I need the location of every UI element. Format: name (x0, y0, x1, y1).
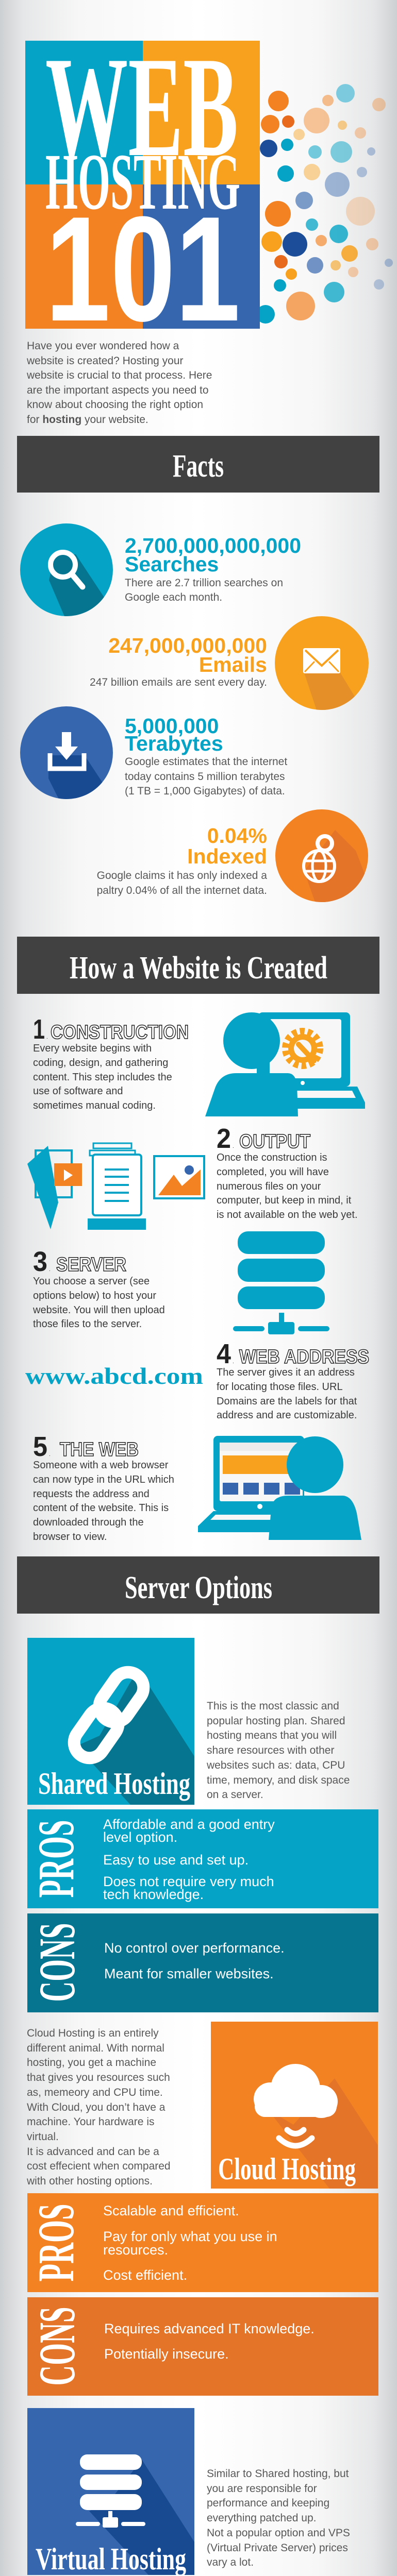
heading bar: Server Options (17, 1556, 379, 1614)
cloud pros: Cost efficient. (103, 2267, 187, 2283)
step heading: . (49, 1452, 51, 1458)
fact numbers (108, 634, 267, 676)
step text: downloaded through the (33, 1517, 144, 1528)
shared cons: Meant for smaller websites. (104, 1966, 274, 1981)
step text: Once the construction is (217, 1152, 327, 1163)
icon: envelope circle (275, 616, 369, 710)
title block: WEB HOSTING 101 (25, 41, 260, 329)
step text: computer, but keep in mind, it (217, 1195, 351, 1206)
step text (33, 1043, 172, 1111)
fact numbers (187, 824, 267, 868)
virtual hosting description: vary a lot. (207, 2556, 254, 2568)
intro text: Have you ever wondered how a (27, 340, 179, 352)
cloud hosting description: With Cloud, you don’t have a (27, 2102, 165, 2113)
icon: output files (27, 1143, 205, 1230)
intro text: are the important aspects you need to (27, 384, 209, 396)
shared hosting description: on a server. (207, 1789, 263, 1801)
virtual hosting description: (Virtual Private Server) prices (207, 2542, 348, 2554)
fact numbers (125, 534, 301, 576)
virtual hosting description: performance and keeping (207, 2497, 329, 2509)
icon: server (76, 2454, 145, 2528)
fact text: today contains 5 million terabytes (125, 771, 285, 782)
icon: globe circle (275, 809, 368, 902)
shared hosting description: hosting means that you will (207, 1730, 337, 1741)
shared pros (27, 1809, 378, 1908)
fact text: There are 2.7 trillion searches on (125, 577, 283, 589)
fact text: Google claims it has only indexed a (97, 870, 267, 882)
icon: chain link (68, 1666, 150, 1764)
intro text: website is crucial to that process. Here (27, 369, 212, 381)
step text: address and are customizable. (217, 1410, 357, 1421)
step heading: . (49, 1267, 51, 1273)
intro text: know about choosing the right option (27, 399, 203, 411)
step text: Every website begins with (33, 1043, 152, 1054)
shared hosting description: websites such as: data, CPU (207, 1759, 345, 1771)
cloud hosting description: Cloud Hosting is an entirely (27, 2027, 159, 2039)
shared hosting description (207, 1700, 350, 1801)
shared cons (27, 1913, 378, 2012)
heading bar: How a Website is Created (17, 937, 379, 994)
shared pros: level option. (103, 1829, 177, 1845)
step heading (33, 1015, 189, 1041)
shared pros: Easy to use and set up. (103, 1852, 249, 1868)
panel: cloud hosting (211, 2022, 378, 2189)
step text: completed, you will have (217, 1166, 329, 1178)
step heading: . (233, 1359, 234, 1365)
step text (33, 1276, 165, 1330)
icon: cloud (254, 2064, 338, 2118)
cloud hosting description: machine. Your hardware is (27, 2116, 154, 2128)
cloud cons (27, 2297, 378, 2396)
cloud hosting description: different animal. With normal (27, 2042, 164, 2054)
step text: browser to view. (33, 1531, 107, 1543)
cloud hosting description: that gives you resources such (27, 2072, 170, 2083)
cloud hosting description: as, memeory and CPU time. (27, 2087, 163, 2098)
fact 2: emails (90, 616, 369, 710)
step text: content of the website. This is (33, 1502, 169, 1514)
intro text: for hosting your website. (27, 414, 148, 426)
cloud pros (27, 2193, 378, 2292)
fact numbers: 2,700,000,000,000 (125, 534, 301, 557)
heading bar: Server Options: Server Options (125, 1570, 272, 1605)
fact numbers: 5,000,000 (125, 714, 219, 738)
shared pros: tech knowledge. (103, 1887, 204, 1902)
cloud cons: Requires advanced IT knowledge. (104, 2321, 315, 2336)
step text: sometimes manual coding. (33, 1100, 156, 1111)
step text: use of software and (33, 1086, 123, 1097)
intro text (27, 340, 212, 426)
step text: You choose a server (see (33, 1276, 150, 1287)
cloud hosting description: It is advanced and can be a (27, 2146, 159, 2158)
step 4: web address (217, 1341, 369, 1421)
step text: The server gives it an address (217, 1367, 355, 1378)
step heading (33, 1247, 127, 1273)
step text: Domains are the labels for that (217, 1396, 357, 1407)
step text: requests the address and (33, 1488, 150, 1500)
shared hosting description: time, memory, and disk space (207, 1774, 350, 1786)
fact text (125, 577, 283, 603)
decorative icon bubbles (260, 84, 393, 324)
fact numbers: Indexed (187, 844, 267, 868)
fact numbers (125, 714, 223, 755)
step heading (217, 1125, 310, 1151)
step heading: . (46, 1035, 48, 1040)
panel: shared hosting (27, 1638, 194, 1805)
virtual hosting description: everything patched up. (207, 2512, 316, 2524)
step text: options below) to host your (33, 1290, 156, 1301)
shared hosting description: share resources with other (207, 1744, 334, 1756)
fact text: 247 billion emails are sent every day. (90, 676, 267, 688)
step heading (217, 1341, 369, 1366)
cloud pros: Scalable and efficient. (103, 2203, 239, 2218)
fact text: paltry 0.04% of all the internet data. (97, 885, 267, 896)
step text: coding, design, and gathering (33, 1057, 168, 1069)
step text: can now type in the URL which (33, 1474, 174, 1485)
fact 4: indexed (97, 809, 368, 902)
step 2: output (217, 1125, 358, 1221)
virtual hosting description: you are responsible for (207, 2483, 317, 2495)
step 3: server (33, 1247, 165, 1330)
heading bar: Facts: Facts (173, 449, 224, 484)
step text: content. This step includes the (33, 1072, 172, 1083)
fact numbers: Terabytes (125, 732, 223, 755)
step text: those files to the server. (33, 1318, 142, 1330)
step text: Someone with a web browser (33, 1460, 168, 1471)
fact numbers: 0.04% (207, 824, 267, 848)
cloud hosting description: hosting, you get a machine (27, 2057, 156, 2069)
fact text (97, 870, 267, 896)
cloud hosting description (27, 2027, 171, 2187)
cloud cons: Potentially insecure. (104, 2346, 229, 2362)
fact text: (1 TB = 1,000 Gigabytes) of data. (125, 785, 285, 797)
icon: magnifier circle (20, 523, 113, 616)
shared pros: Does not require very much (103, 1874, 274, 1889)
shared hosting description: popular hosting plan. Shared (207, 1715, 345, 1727)
heading bar: Facts (17, 436, 379, 493)
fact numbers: Searches (125, 552, 219, 576)
shared pros: Affordable and a good entry (103, 1817, 275, 1832)
step 1: construction (33, 1015, 189, 1111)
icon: download circle (20, 706, 113, 799)
fact text (125, 756, 288, 797)
icon: person browsing (198, 1436, 361, 1540)
shared hosting description: This is the most classic and (207, 1700, 339, 1712)
fact 1: searches (20, 523, 301, 616)
cloud pros: Pay for only what you use in (103, 2229, 277, 2244)
cloud hosting description: cost effecient when compared (27, 2160, 171, 2172)
fact numbers: Emails (199, 653, 267, 676)
fact text: Google each month. (125, 591, 222, 603)
step text: is not available on the web yet. (217, 1209, 358, 1221)
icon: server stack (233, 1231, 329, 1334)
step heading: . (233, 1144, 234, 1149)
step text: website. You will then upload (33, 1304, 165, 1316)
step text (217, 1367, 357, 1421)
cloud hosting description: virtual. (27, 2131, 59, 2143)
fact 3: terabytes (20, 706, 288, 799)
step text (33, 1460, 174, 1543)
cloud hosting description: with other hosting options. (27, 2175, 153, 2187)
virtual hosting description (207, 2468, 350, 2568)
cloud pros: resources. (103, 2242, 168, 2258)
fact numbers: 247,000,000,000 (108, 634, 267, 657)
step 5: the web (33, 1433, 174, 1543)
step text: for locating those files. URL (217, 1381, 343, 1393)
url example: www.abcd.com (25, 1363, 203, 1388)
step text (217, 1152, 358, 1221)
virtual hosting description: Not a popular option and VPS (207, 2527, 350, 2539)
icon: person at computer with gear (205, 1012, 365, 1116)
shared cons: No control over performance. (104, 1940, 285, 1956)
fact text: Google estimates that the internet (125, 756, 287, 768)
step text: numerous files on your (217, 1181, 321, 1192)
intro text: website is created? Hosting your (27, 355, 184, 367)
step heading (33, 1433, 139, 1459)
panel: virtual hosting (27, 2408, 194, 2575)
virtual hosting description: Similar to Shared hosting, but (207, 2468, 349, 2480)
